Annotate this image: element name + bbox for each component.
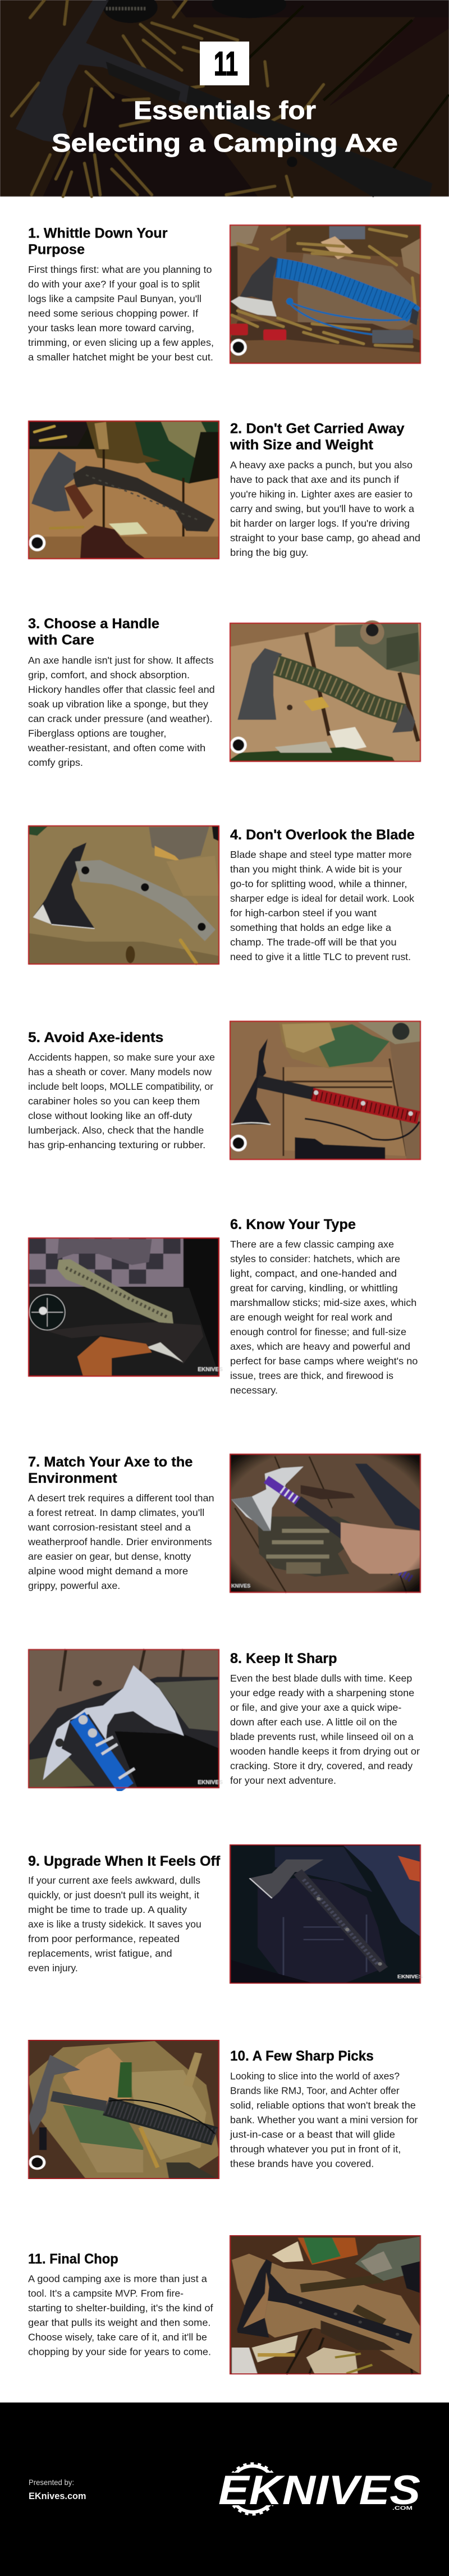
body text 11: chopping by your side for years to come. <box>28 2346 211 2357</box>
body text 8: your edge ready with a sharpening stone <box>230 1687 414 1698</box>
body text 10: through whatever you put in front of it, <box>230 2144 401 2155</box>
heading 3: with Care <box>28 632 94 648</box>
heading 2 <box>230 421 405 453</box>
body text 7: a forest retreat. In damp climates, you'll <box>28 1507 204 1518</box>
body text 6: There are a few classic camping axe <box>230 1239 394 1250</box>
body text 6 <box>230 1239 418 1396</box>
body text 7: weatherproof handle. Drier environments <box>28 1536 212 1547</box>
header banner <box>0 0 449 197</box>
body text 11 <box>28 2273 213 2357</box>
body text 5: include belt loops, MOLLE compatibility, or <box>28 1081 213 1092</box>
body text 9: from poor performance, repeated <box>28 1933 180 1944</box>
body text 10: just-in-case or a beast that will glide <box>230 2129 395 2140</box>
body text 6: perfect for base camps where weight's no <box>230 1355 418 1367</box>
body text 7: alpine wood might demand a more <box>28 1565 188 1577</box>
body text 10: solid, reliable options that won't break the <box>230 2100 416 2111</box>
photo 9: dark axe on navy pack: EKNIVES <box>397 1974 423 1980</box>
body text 2: A heavy axe packs a punch, but you also <box>230 459 413 471</box>
heading 2: with Size and Weight <box>230 437 374 453</box>
photo 10: tomahawk on tan canvas and gloves <box>28 2040 220 2179</box>
section 6: type <box>28 1217 418 1396</box>
body text 3: comfy grips. <box>28 757 83 768</box>
body text 10: these brands have you covered. <box>230 2158 374 2169</box>
heading 6: 6. Know Your Type <box>230 1217 356 1232</box>
heading 10: 10. A Few Sharp Picks <box>230 2048 374 2064</box>
body text 9: axe is like a trusty sidekick. It saves you <box>28 1919 201 1930</box>
presented by text: Presented by: <box>29 2478 74 2487</box>
body text 4 <box>230 849 414 962</box>
section 7: environment <box>28 1454 421 1593</box>
heading 1 <box>28 226 168 257</box>
body text 3: Fiberglass options are tougher, <box>28 728 166 739</box>
body text 10 <box>230 2071 418 2169</box>
section 8: sharpening <box>28 1649 420 1788</box>
body text 10: Brands like RMJ, Toor, and Achter offer <box>230 2085 400 2097</box>
heading 7: Environment <box>28 1470 117 1486</box>
body text 8: blade prevents rust, while linseed oil on a <box>230 1731 414 1742</box>
section 11: final chop <box>28 2235 421 2374</box>
body text 1: a smaller hatchet might be your best cut. <box>28 351 213 363</box>
body text 6: styles to consider: hatchets, which are <box>230 1253 400 1264</box>
body text 2: bring the big guy. <box>230 547 309 558</box>
section 5: safety <box>28 1021 421 1160</box>
body text 5: close without looking like an off-duty <box>28 1110 193 1121</box>
body text 9: quickly, or just doesn't pull its weight, it <box>28 1889 199 1901</box>
body text 11: Choose wisely, take care of it, and it'll be <box>28 2331 207 2342</box>
body text 6: axes, which are heavy and powerful and <box>230 1341 410 1352</box>
body text 4: sharper edge is ideal for detail work. Look <box>230 893 414 904</box>
body text 4: than you might think. A wide bit is your <box>230 864 402 875</box>
body text 7: are easier on gear, but dense, knotty <box>28 1551 191 1562</box>
body text 6: enough control for finesse; and full-size <box>230 1326 406 1337</box>
photo 9: dark axe on navy pack <box>229 1844 423 1984</box>
body text 8: cracking. Store it dry, covered, and ready <box>230 1760 413 1771</box>
body text 11: A good camping axe is more than just a <box>28 2273 207 2284</box>
body text 5 <box>28 1052 215 1150</box>
section 4: blade <box>28 825 415 965</box>
photo 8: polished axe head on gloves: EKNIVES <box>198 1779 223 1785</box>
body text 8: down after each use. A little oil on the <box>230 1716 397 1728</box>
body text 6: light, compact, and one-handed and <box>230 1268 397 1279</box>
body text 6: marshmallow sticks; mid-size axes, which <box>230 1297 416 1308</box>
heading 3: 3. Choose a Handle <box>28 616 159 632</box>
photo 6: axe in plaid box <box>28 1237 223 1377</box>
body text 2: bit harder on larger logs. If you're driving <box>230 518 410 529</box>
section 10: picks <box>28 2040 418 2179</box>
section 3: handle <box>28 616 421 768</box>
body text 7 <box>28 1492 214 1591</box>
photo 7: hand holding purple axe: KNIVES <box>231 1583 250 1588</box>
body text 1: do with your axe? If your goal is to split <box>28 278 200 290</box>
header photo: axe and bullets on dark wood <box>0 0 449 199</box>
body text 2: you're hiking in. Lighter axes are easier to <box>230 488 413 500</box>
body text 4: champ. The trade-off will be that you <box>230 937 397 948</box>
body text 8 <box>230 1673 420 1786</box>
body text 9: If your current axe feels awkward, dulls <box>28 1875 200 1886</box>
heading 4: 4. Don't Overlook the Blade <box>230 827 415 843</box>
body text 5: has grip-enhancing texturing or rubber. <box>28 1139 205 1150</box>
body text 2 <box>230 459 420 558</box>
title: Selecting a Camping Axe <box>52 129 398 157</box>
body text 7: want corrosion-resistant steel and a <box>28 1522 191 1533</box>
section 2: size and weight <box>28 421 420 559</box>
heading 5: 5. Avoid Axe-idents <box>28 1030 163 1045</box>
body text 4: go-to for splitting wood, while a thinner, <box>230 878 407 889</box>
body text 8: Even the best blade dulls with time. Keep <box>230 1673 412 1684</box>
body text 6: issue, trees are thick, and firewood is <box>230 1370 393 1381</box>
photo 2: dark carved handle axe <box>28 420 220 560</box>
body text 11: starting to shelter-building, it's the kind of <box>28 2302 213 2313</box>
body text 1: trimming, or even slicing up a few apples, <box>28 337 214 348</box>
photo 6: axe in plaid box: EKNIVES <box>198 1367 223 1373</box>
section 9: upgrade <box>28 1844 423 1984</box>
body text 6: are enough weight for real work and <box>230 1312 392 1323</box>
photo 1: blue paracord hatchet <box>229 224 421 364</box>
heading 9: 9. Upgrade When It Feels Off <box>28 1853 221 1869</box>
heading 11: 11. Final Chop <box>28 2251 118 2267</box>
body text 4: need to give it a little TLC to prevent rust. <box>230 951 411 962</box>
body text 2: have to pack that axe and its punch if <box>230 474 399 485</box>
body text 9: even injury. <box>28 1962 78 1974</box>
photo 3: camo paracord hatchet <box>229 620 421 762</box>
body text 5: lumberjack. Also, check that the handle <box>28 1125 204 1136</box>
heading 7 <box>28 1454 193 1486</box>
heading 1: Purpose <box>28 241 85 257</box>
number box: 11 <box>214 45 238 83</box>
body text 3: grip, comfort, and shock absorption. <box>28 669 190 680</box>
body text 2: straight to your base camp, go ahead and <box>230 532 420 543</box>
body text 8: for your next adventure. <box>230 1775 336 1786</box>
heading 2: 2. Don't Get Carried Away <box>230 421 405 437</box>
body text 3: Hickory handles offer that classic feel and <box>28 684 215 695</box>
heading 7: 7. Match Your Axe to the <box>28 1454 193 1470</box>
body text 1: First things first: what are you planning to <box>28 264 212 275</box>
number box <box>200 42 249 85</box>
body text 2: carry and swing, but you'll have to work a <box>230 503 414 514</box>
footer <box>0 2403 449 2576</box>
body text 3: soak up vibration like a sponge, but they <box>28 698 208 710</box>
body text 1: need some serious chopping power. If <box>28 308 198 319</box>
body text 6: great for carving, kindling, or whittling <box>230 1282 398 1294</box>
presented by text: EKnives.com <box>29 2491 86 2501</box>
body text 8: wooden handle keeps it from drying out or <box>230 1746 420 1757</box>
body text 1 <box>28 264 214 363</box>
body text 1: logs like a campsite Paul Bunyan, you'll <box>28 293 201 304</box>
photo 8: polished axe head on gloves <box>28 1648 223 1791</box>
body text 5: carabiner holes so you can keep them <box>28 1095 200 1107</box>
photo 5: red handled tomahawk <box>229 1020 421 1161</box>
body text 4: for high-carbon steel if you want <box>230 907 377 919</box>
body text 1: your tasks lean more toward carving, <box>28 322 194 334</box>
body text 3: weather-resistant, and often come with <box>28 742 205 753</box>
body text 4: Blade shape and steel type matter more <box>230 849 412 860</box>
body text 3: An axe handle isn't just for show. It affects <box>28 655 214 666</box>
logo: EKnives: .COM <box>392 2505 413 2511</box>
photo 4: black axe on canvas <box>28 825 220 966</box>
heading 1: 1. Whittle Down Your <box>28 226 168 241</box>
body text 5: Accidents happen, so make sure your axe <box>28 1052 215 1063</box>
heading 8: 8. Keep It Sharp <box>230 1651 337 1666</box>
body text 3: can crack under pressure (and weather). <box>28 713 213 724</box>
body text 9: replacements, wrist fatigue, and <box>28 1948 172 1959</box>
photo 11: black axe on tan scarf <box>229 2235 421 2375</box>
title <box>52 96 398 157</box>
heading 3 <box>28 616 159 648</box>
body text 7: grippy, powerful axe. <box>28 1580 120 1591</box>
body text 10: Looking to slice into the world of axes? <box>230 2071 400 2082</box>
body text 6: necessary. <box>230 1385 278 1396</box>
body text 4: something that holds an edge like a <box>230 922 391 933</box>
presented by text <box>29 2478 86 2501</box>
body text 8: or file, and give your axe a quick wipe- <box>230 1702 402 1713</box>
body text 10: bank. Whether you want a mini version for <box>230 2114 418 2126</box>
body text 7: A desert trek requires a different tool than <box>28 1492 214 1504</box>
body text 9 <box>28 1875 201 1974</box>
title: Essentials for <box>134 96 316 125</box>
body text 11: tool. It's a campsite MVP. From fire- <box>28 2287 184 2299</box>
logo: EKnives: EKNIVES <box>218 2468 420 2513</box>
body text 11: gear that pulls its weight and then some. <box>28 2317 211 2328</box>
body text 3 <box>28 655 215 768</box>
photo 7: hand holding purple axe <box>229 1453 421 1593</box>
body text 5: has a sheath or cover. Many models now <box>28 1066 212 1077</box>
body text 9: might be time to trade up. A quality <box>28 1904 187 1915</box>
section 1: purpose <box>28 225 421 364</box>
